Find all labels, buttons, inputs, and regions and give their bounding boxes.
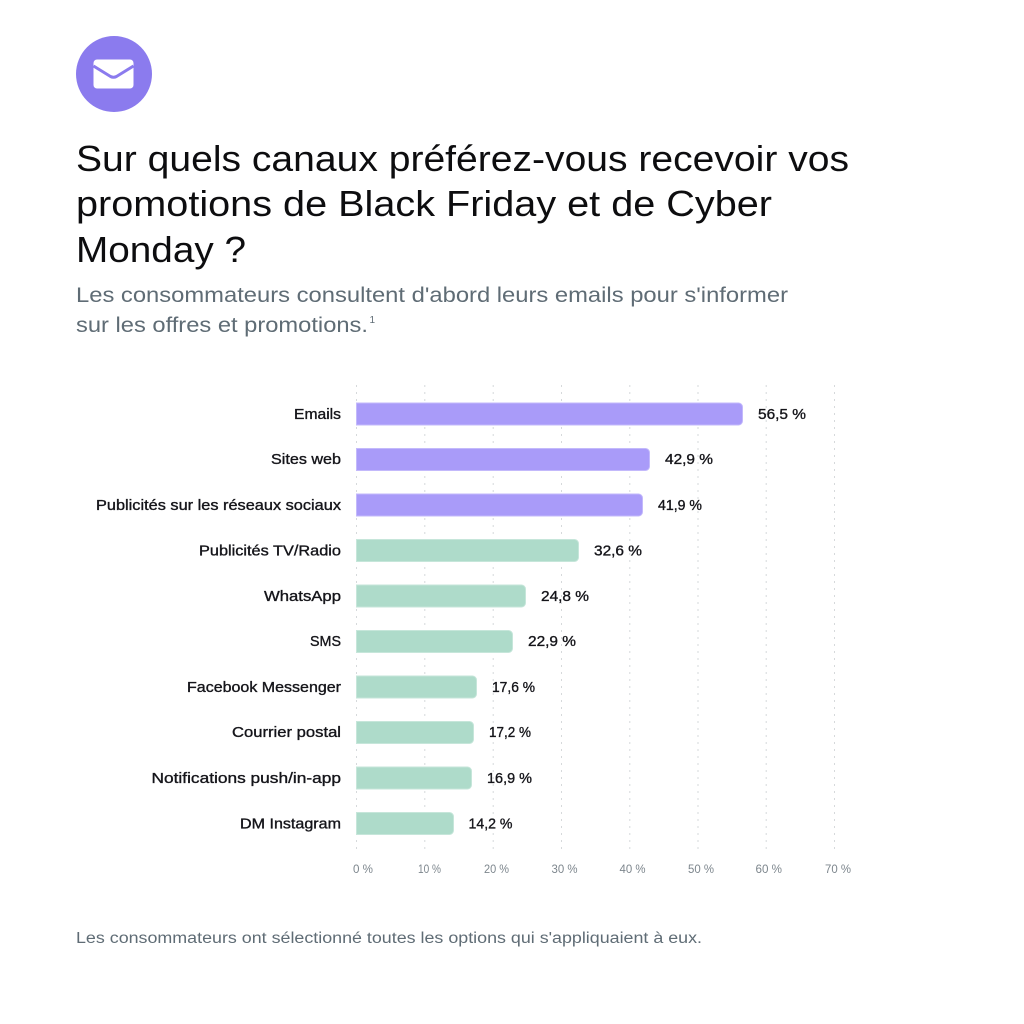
bar: Facebook Messenger: 17,6 % — [492, 680, 535, 696]
bar: Publicités TV/Radio — [199, 540, 642, 562]
bar: Notifications push/in-app: 16,9 % — [487, 771, 532, 787]
bar: SMS: SMS — [310, 634, 341, 650]
bar: Notifications push/in-app — [152, 767, 532, 789]
subtitle: sur les offres et promotions. — [76, 314, 368, 337]
bar: Facebook Messenger: Facebook Messenger — [187, 680, 341, 696]
subtitle: Les consommateurs consultent d'abord leurs emails pour s'informer — [76, 284, 788, 307]
x axis labels: 70 % — [825, 864, 851, 876]
bar: DM Instagram — [240, 812, 513, 834]
bar: Courrier postal — [232, 722, 531, 744]
icon: envelope in purple circle — [76, 36, 152, 112]
x axis labels: 60 % — [756, 864, 782, 876]
bar chart — [96, 385, 851, 876]
bar: WhatsApp: 24,8 % — [541, 589, 589, 605]
subtitle: 1 — [370, 315, 376, 326]
bar: Emails: Emails — [294, 407, 341, 423]
bar: Publicités TV/Radio: 32,6 % — [594, 544, 642, 560]
bar: Courrier postal: 17,2 % — [489, 725, 531, 741]
bar: DM Instagram: DM Instagram — [240, 816, 341, 832]
bar: WhatsApp: WhatsApp — [264, 589, 341, 605]
bar: Notifications push/in-app: Notifications push/in-app — [152, 771, 341, 787]
x axis labels: 40 % — [620, 864, 646, 876]
bar: Facebook Messenger — [187, 676, 535, 698]
x axis labels: 20 % — [484, 864, 509, 876]
subtitle — [76, 284, 788, 337]
bar: Publicités sur les réseaux sociaux: 41,9 % — [658, 498, 702, 514]
bar: SMS: 22,9 % — [528, 634, 576, 650]
bar: Publicités sur les réseaux sociaux: Publicités sur les réseaux sociaux — [96, 498, 342, 514]
bar: Emails: 56,5 % — [758, 407, 806, 423]
bar: Sites web — [271, 448, 713, 470]
bar: Publicités sur les réseaux sociaux — [96, 494, 702, 516]
x axis labels: 30 % — [552, 864, 578, 876]
footnote: Les consommateurs ont sélectionné toutes les options qui s'appliquaient à eux. — [76, 930, 702, 947]
bar: Publicités TV/Radio: Publicités TV/Radio — [199, 544, 341, 560]
bar: Courrier postal: Courrier postal — [232, 725, 341, 741]
bar: Sites web: Sites web — [271, 452, 341, 468]
title: Monday ? — [76, 229, 246, 270]
bar: Sites web: 42,9 % — [665, 452, 713, 468]
x axis labels — [353, 864, 851, 876]
title: Sur quels canaux préférez-vous recevoir vos — [76, 138, 849, 179]
title — [76, 138, 849, 270]
bar: SMS — [310, 630, 576, 652]
x axis labels: 50 % — [688, 864, 714, 876]
bar: Emails — [294, 403, 806, 425]
x axis labels: 0 % — [353, 864, 373, 876]
x axis labels: 10 % — [418, 864, 441, 876]
bar: WhatsApp — [264, 585, 589, 607]
bar: DM Instagram: 14,2 % — [468, 816, 513, 832]
title: promotions de Black Friday et de Cyber — [76, 183, 772, 224]
